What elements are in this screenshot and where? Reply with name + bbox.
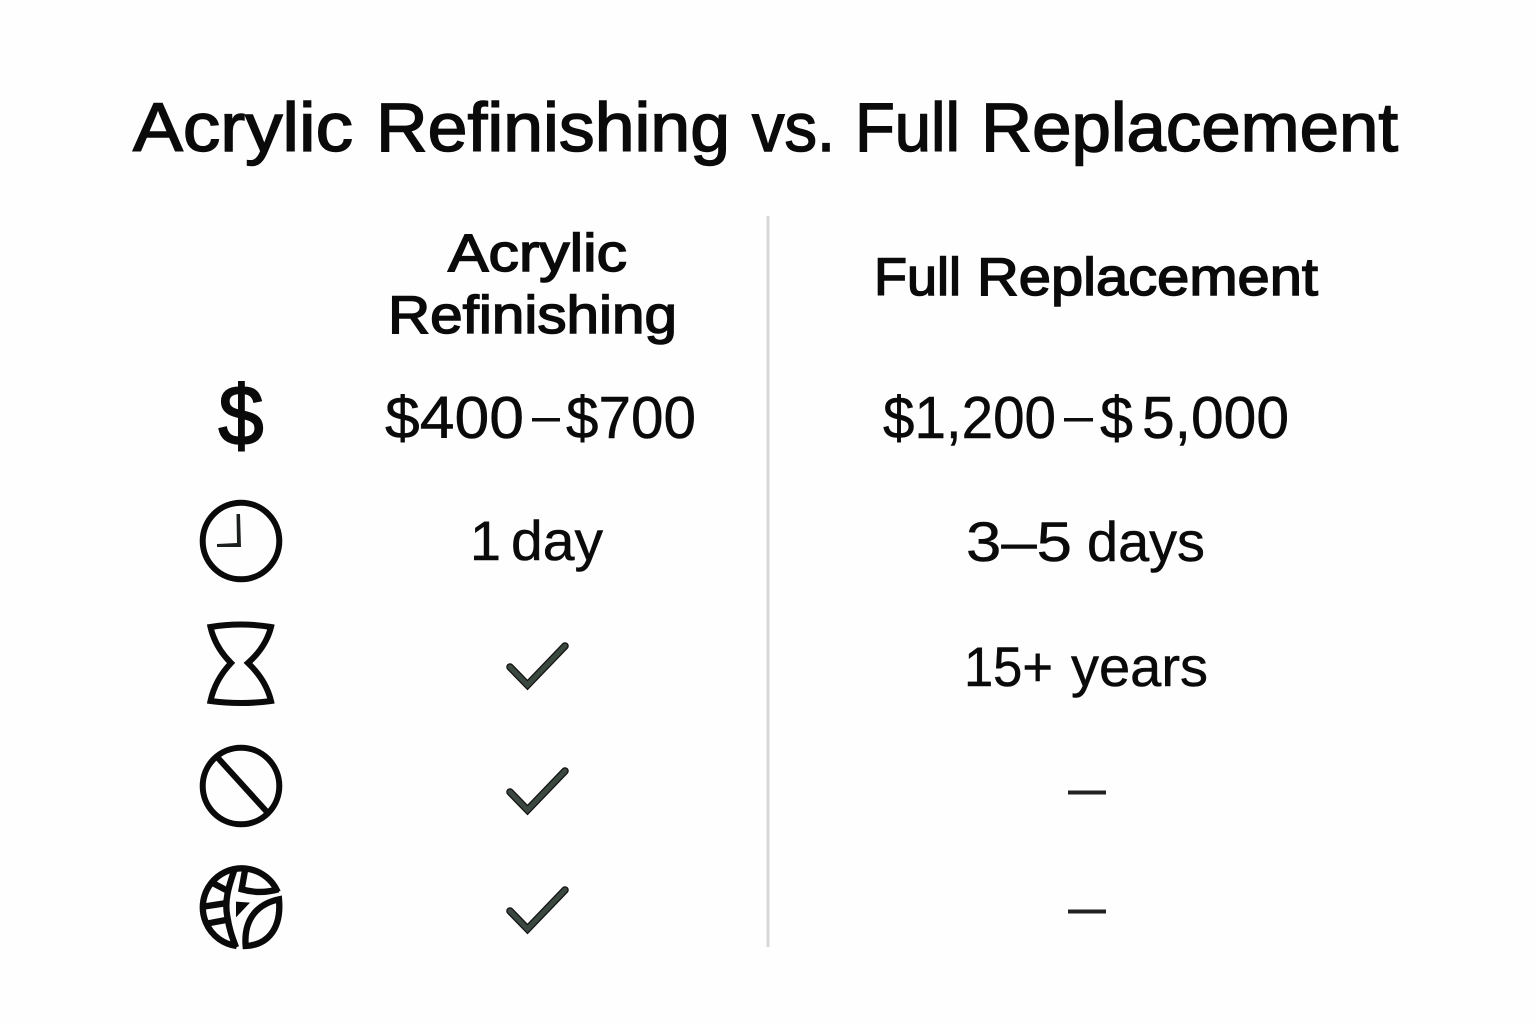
column heading: full replacement: Replacement — [977, 248, 1318, 307]
icon: hourglass — [210, 624, 271, 703]
dash: full replacement, eco-friendly — [1068, 910, 1106, 914]
time: acrylic refinishing: 1 — [470, 509, 501, 572]
cost: full replacement: $ — [1100, 385, 1133, 451]
icon: prohibited sign — [203, 748, 279, 824]
cost: acrylic refinishing: $400 — [385, 385, 524, 451]
title: vs. — [752, 89, 835, 166]
title: Full — [855, 89, 960, 166]
column heading: full replacement: Full — [874, 248, 961, 307]
lifespan: full replacement: years — [1071, 635, 1208, 698]
lifespan: full replacement — [964, 635, 1208, 698]
time: acrylic refinishing — [470, 509, 603, 572]
cost: full replacement: 5,000 — [1142, 385, 1289, 451]
title: Replacement — [981, 89, 1398, 166]
column heading: acrylic refinishing: Refinishing — [388, 286, 677, 345]
icon: check mark, no demolition — [510, 771, 565, 810]
column heading: acrylic refinishing — [388, 224, 677, 345]
cost: full replacement: $1,200 — [883, 385, 1056, 451]
icon: dollar sign: $ — [218, 368, 264, 462]
column divider — [766, 216, 770, 947]
cost: full replacement — [883, 385, 1289, 451]
cost: acrylic refinishing: $700 — [566, 385, 696, 451]
icon: eco globe with leaf — [203, 867, 279, 947]
icon: clock — [203, 503, 279, 579]
title: Acrylic — [133, 89, 353, 166]
dash: full replacement — [1068, 790, 1106, 794]
title — [133, 89, 1398, 166]
time: full replacement: 3–5 — [966, 510, 1072, 573]
icon: check mark, lifespan — [510, 646, 565, 685]
time: acrylic refinishing: day — [511, 509, 603, 572]
lifespan: full replacement: 15+ — [964, 635, 1053, 698]
icon: check mark, eco-friendly — [510, 890, 565, 929]
time: full replacement: days — [1087, 510, 1205, 573]
title: Refinishing — [376, 89, 730, 166]
column heading: acrylic refinishing: Acrylic — [448, 224, 627, 283]
time: full replacement — [966, 510, 1205, 573]
cost: acrylic refinishing — [385, 385, 696, 451]
